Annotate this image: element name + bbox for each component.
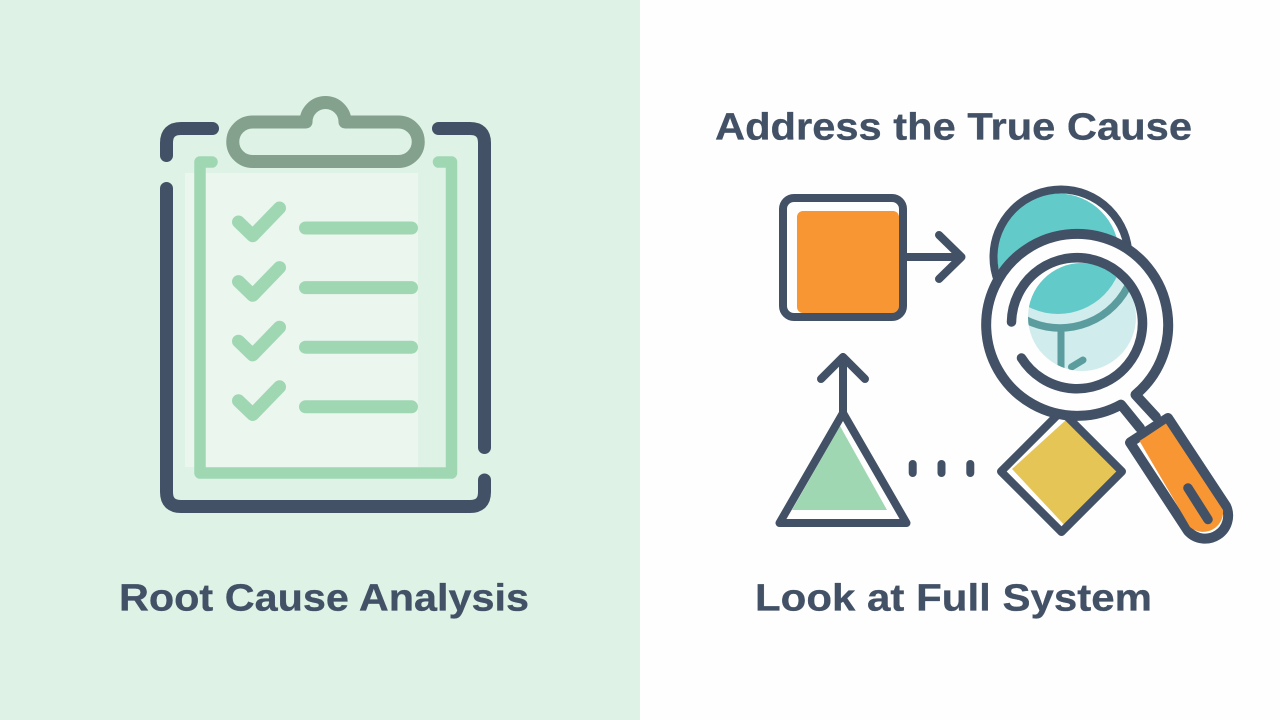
heading: look at full system: Look at Full System	[755, 578, 1152, 620]
magnified view of teal circle	[1028, 263, 1136, 371]
magnifier white lens backing	[986, 234, 1168, 416]
icon: orange square node	[783, 198, 903, 317]
checklist rows	[238, 208, 412, 414]
icon: clipboard with checklist	[166, 102, 484, 506]
magnifier handle	[1130, 418, 1228, 539]
checklist row 1	[238, 208, 412, 236]
arrow: square to circle	[903, 235, 962, 279]
icon: teal circle node	[994, 190, 1128, 324]
heading: address the true cause: Address the True Cause	[715, 106, 1192, 148]
clipboard paper sheet	[185, 173, 418, 467]
arrow: triangle to square	[821, 357, 865, 412]
checklist row 4	[238, 387, 412, 414]
icon: green triangle node	[780, 413, 906, 523]
clipboard inner page outline	[200, 162, 452, 473]
checklist row 3	[238, 327, 412, 355]
panel: root cause analysis background	[0, 0, 640, 720]
icon: magnifying glass	[981, 228, 1234, 544]
magnifier outer ring and neck	[986, 234, 1168, 428]
handle slot	[1188, 488, 1208, 520]
heading: root cause analysis: Root Cause Analysis	[119, 578, 529, 620]
checklist row 2	[238, 268, 412, 295]
dotted connector	[913, 464, 970, 473]
clipboard clip	[233, 102, 418, 162]
panel: right background	[640, 0, 1280, 720]
clipboard outer frame	[166, 128, 484, 506]
handle orange grip	[1140, 424, 1223, 532]
icon: yellow diamond node	[1001, 411, 1122, 532]
magnifier inner ring	[1012, 258, 1142, 389]
